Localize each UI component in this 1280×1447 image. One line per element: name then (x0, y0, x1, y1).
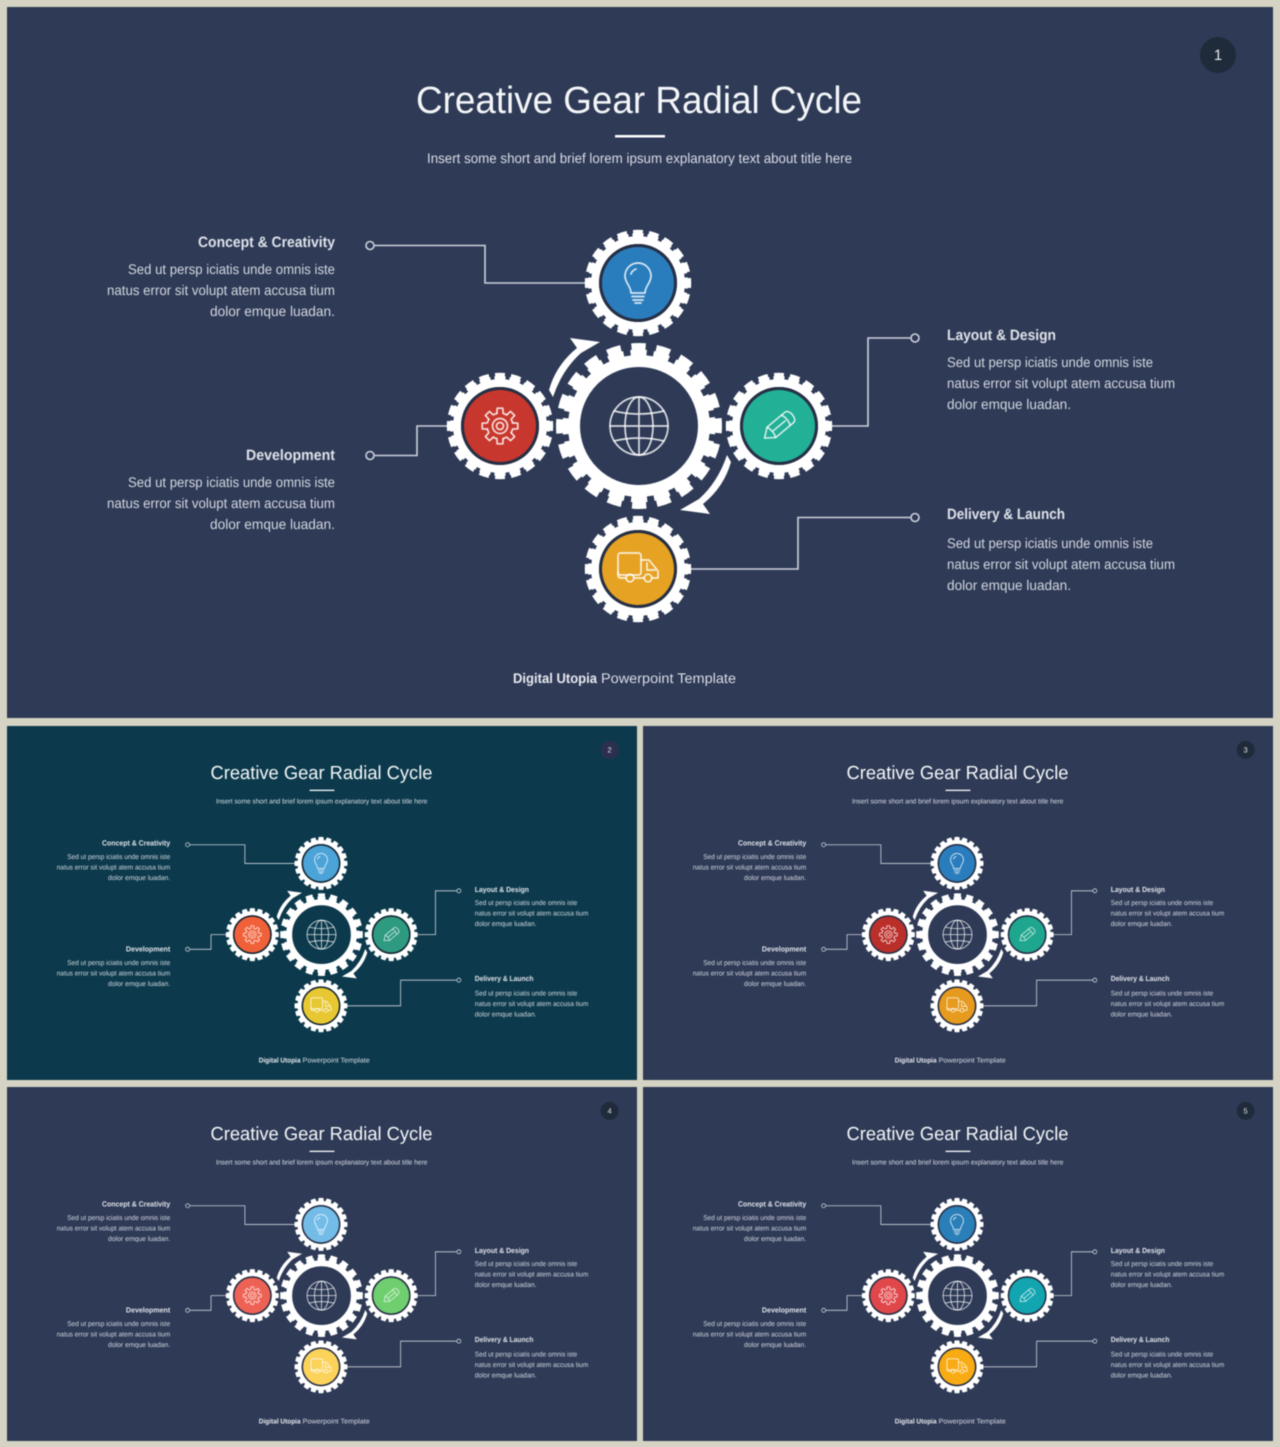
gear: yellow truck (296, 980, 346, 1031)
page number badge: 5 (1244, 1107, 1248, 1115)
panel: slide 3 small navy (642, 725, 1274, 1081)
text block: Concept & Creativity: natus error sit volupt atem accusa tium (107, 282, 335, 298)
text block: Development: Development (246, 447, 335, 464)
text block: Concept & Creativity: Sed ut persp iciatis unde omnis iste (128, 261, 335, 277)
page number badge (1237, 1102, 1255, 1120)
subtitle: Insert some short and brief lorem ipsum explanatory text about title here (427, 150, 852, 166)
text block: Delivery & Launch: dolor emque luadan. (1111, 1010, 1172, 1018)
footer (259, 1417, 370, 1425)
gear: blue bulb (932, 1199, 982, 1250)
text block: Layout & Design: dolor emque luadan. (475, 1281, 536, 1289)
text block: Development: Sed ut persp iciatis unde omnis iste (703, 959, 806, 966)
page number badge: 1 (1214, 47, 1222, 64)
connector: Development (822, 1296, 866, 1312)
connector: Layout (1051, 1250, 1097, 1296)
title divider (946, 1151, 970, 1152)
footer: Digital Utopia (259, 1056, 301, 1064)
text block: Development (57, 1306, 170, 1348)
text block: Delivery & Launch: Sed ut persp iciatis unde omnis iste (1111, 1350, 1213, 1358)
text block: Concept & Creativity: dolor emque luadan. (744, 1234, 806, 1242)
page number badge: 2 (608, 746, 612, 754)
arrow: upper left (277, 891, 302, 920)
gear: green pencil (728, 375, 830, 477)
text block: Development: dolor emque luadan. (108, 1340, 170, 1348)
page number badge: 3 (1244, 746, 1248, 754)
connector: Concept (186, 843, 297, 863)
text block: Development: dolor emque luadan. (108, 979, 170, 987)
text block: Development: natus error sit volupt atem accusa tium (57, 1330, 170, 1338)
gear: green pencil (1002, 909, 1053, 960)
gear: yellow truck (932, 980, 982, 1031)
text block: Delivery & Launch (1111, 1335, 1224, 1379)
gear: light yellow truck (296, 1341, 346, 1392)
arrow: lower right (342, 1310, 367, 1339)
title: Creative Gear Radial Cycle (847, 1123, 1068, 1144)
text block: Development (57, 945, 170, 987)
gear: blue bulb (932, 838, 982, 889)
footer: Powerpoint Template (939, 1056, 1006, 1064)
gear: coral cog (227, 1270, 278, 1321)
text block: Layout & Design: natus error sit volupt atem accusa tium (475, 1270, 588, 1278)
text block: Development (107, 447, 335, 532)
text block: Concept & Creativity: natus error sit volupt atem accusa tium (57, 1224, 170, 1232)
text block: Layout & Design: Sed ut persp iciatis unde omnis iste (475, 1260, 577, 1268)
panel: slide 1 large (6, 6, 1274, 719)
text block: Layout & Design: Layout & Design (475, 885, 529, 894)
page number badge (1237, 741, 1255, 759)
text block: Layout & Design: dolor emque luadan. (947, 396, 1071, 412)
text block: Delivery & Launch: Delivery & Launch (947, 506, 1065, 523)
text block: Delivery & Launch: Delivery & Launch (1111, 974, 1169, 983)
footer (895, 1417, 1006, 1425)
text block: Development: natus error sit volupt atem accusa tium (57, 969, 170, 977)
text block: Layout & Design: natus error sit volupt atem accusa tium (1111, 909, 1224, 917)
text block: Concept & Creativity: natus error sit volupt atem accusa tium (57, 863, 170, 871)
text block: Development: Sed ut persp iciatis unde omnis iste (703, 1320, 806, 1327)
text block: Layout & Design: Layout & Design (947, 327, 1056, 344)
arrow: lower right (680, 455, 731, 514)
text block: Concept & Creativity (693, 1200, 807, 1242)
text block: Development: dolor emque luadan. (744, 979, 806, 987)
connector: Delivery (685, 514, 919, 569)
footer (513, 670, 736, 686)
text block: Concept & Creativity (693, 839, 807, 881)
connector: Layout (415, 889, 461, 935)
text block: Delivery & Launch (947, 506, 1175, 593)
text block: Layout & Design: Sed ut persp iciatis unde omnis iste (1111, 1260, 1213, 1268)
title: Creative Gear Radial Cycle (211, 1123, 432, 1144)
gear: blue bulb (587, 232, 689, 334)
connector: Layout (415, 1250, 461, 1296)
text block: Concept & Creativity: dolor emque luadan. (210, 303, 335, 319)
text block: Delivery & Launch: natus error sit volupt atem accusa tium (1111, 1360, 1224, 1368)
text block: Development: Development (126, 1306, 170, 1315)
panel: slide 4 small navy light colours (6, 1086, 638, 1442)
footer: Powerpoint Template (939, 1417, 1006, 1425)
connector: Delivery (344, 1339, 461, 1367)
text block: Concept & Creativity: Sed ut persp iciatis unde omnis iste (67, 852, 170, 860)
text block: Development: Sed ut persp iciatis unde omnis iste (67, 959, 170, 966)
text block: Development: dolor emque luadan. (744, 1340, 806, 1348)
subtitle: Insert some short and brief lorem ipsum explanatory text about title here (216, 1158, 428, 1166)
text block: Layout & Design: Sed ut persp iciatis unde omnis iste (1111, 899, 1213, 907)
text block: Concept & Creativity: natus error sit volupt atem accusa tium (693, 863, 806, 871)
text block: Layout & Design: dolor emque luadan. (1111, 1281, 1172, 1289)
text block: Development: Sed ut persp iciatis unde omnis iste (67, 1320, 170, 1327)
text block: Layout & Design (1111, 885, 1224, 928)
gear: orange truck (932, 1341, 982, 1392)
arrow: upper left (913, 1252, 938, 1281)
connector: Concept (186, 1204, 297, 1224)
subtitle: Insert some short and brief lorem ipsum explanatory text about title here (852, 797, 1064, 805)
text block: Concept & Creativity (107, 234, 336, 319)
text block: Layout & Design: Sed ut persp iciatis unde omnis iste (475, 899, 577, 907)
arrow: upper left (277, 1252, 302, 1281)
subtitle: Insert some short and brief lorem ipsum explanatory text about title here (852, 1158, 1064, 1166)
gear: green pencil (366, 909, 417, 960)
gear: teal pencil (1002, 1270, 1053, 1321)
page number badge (601, 1102, 619, 1120)
page number badge (601, 741, 619, 759)
text block: Concept & Creativity: Concept & Creativity (738, 1200, 807, 1208)
title divider (310, 1151, 334, 1152)
gear: blue bulb (296, 838, 346, 889)
connector: Concept (822, 1204, 933, 1224)
text block: Development: Development (762, 945, 806, 954)
title: Creative Gear Radial Cycle (847, 762, 1068, 783)
footer: Powerpoint Template (601, 670, 736, 686)
text block: Delivery & Launch: natus error sit volupt atem accusa tium (475, 999, 588, 1007)
text block: Development: dolor emque luadan. (210, 516, 335, 532)
text block: Concept & Creativity: Concept & Creativity (102, 839, 171, 847)
connector: Delivery (344, 978, 461, 1006)
text block: Concept & Creativity: dolor emque luadan. (108, 1234, 170, 1242)
text block: Concept & Creativity: Sed ut persp iciatis unde omnis iste (67, 1213, 170, 1221)
text block: Delivery & Launch: Delivery & Launch (475, 974, 533, 983)
text block: Concept & Creativity: Concept & Creativity (198, 234, 336, 251)
text block: Development (693, 945, 806, 987)
text block: Development: natus error sit volupt atem accusa tium (107, 495, 335, 511)
gear: red cog (863, 1270, 914, 1321)
footer: Powerpoint Template (303, 1056, 370, 1064)
text block: Concept & Creativity (57, 839, 171, 881)
text block: Delivery & Launch: dolor emque luadan. (1111, 1371, 1172, 1379)
text block: Delivery & Launch: Sed ut persp iciatis unde omnis iste (947, 535, 1153, 551)
text block: Layout & Design: Layout & Design (1111, 885, 1165, 894)
text block: Layout & Design: natus error sit volupt atem accusa tium (1111, 1270, 1224, 1278)
gear: orange cog (227, 909, 278, 960)
footer: Digital Utopia (513, 670, 597, 686)
central gear with globe (918, 895, 997, 974)
connector: Development (186, 935, 230, 951)
text block: Delivery & Launch: natus error sit volupt atem accusa tium (475, 1360, 588, 1368)
gear: red cog (863, 909, 914, 960)
text block: Concept & Creativity: dolor emque luadan. (108, 873, 170, 881)
text block: Development: Development (762, 1306, 806, 1315)
arrow: upper left (913, 891, 938, 920)
connector: Concept (822, 843, 933, 863)
connector: Layout (826, 334, 919, 426)
connector: Concept (366, 242, 590, 283)
text block: Concept & Creativity (57, 1200, 171, 1242)
arrow: upper left (549, 338, 600, 397)
gear: light blue bulb (296, 1199, 346, 1250)
text block: Delivery & Launch: Sed ut persp iciatis unde omnis iste (475, 1350, 577, 1358)
text block: Delivery & Launch: dolor emque luadan. (475, 1010, 536, 1018)
footer: Digital Utopia (895, 1056, 937, 1064)
text block: Delivery & Launch: natus error sit volupt atem accusa tium (1111, 999, 1224, 1007)
text block: Development: Development (126, 945, 170, 954)
footer (895, 1056, 1006, 1064)
footer: Powerpoint Template (303, 1417, 370, 1425)
title divider (310, 790, 334, 791)
connector: Layout (1051, 889, 1097, 935)
subtitle: Insert some short and brief lorem ipsum explanatory text about title here (216, 797, 428, 805)
text block: Concept & Creativity: Sed ut persp iciatis unde omnis iste (703, 852, 806, 860)
footer: Digital Utopia (895, 1417, 937, 1425)
text block: Delivery & Launch: natus error sit volupt atem accusa tium (947, 556, 1175, 572)
text block: Layout & Design: Sed ut persp iciatis unde omnis iste (947, 354, 1153, 370)
panel: slide 2 small teal (6, 725, 638, 1081)
connector: Development (366, 426, 455, 460)
arrow: lower right (342, 949, 367, 978)
connector: Development (822, 935, 866, 951)
text block: Layout & Design: natus error sit volupt atem accusa tium (475, 909, 588, 917)
text block: Layout & Design (475, 885, 588, 928)
footer (259, 1056, 370, 1064)
title: Creative Gear Radial Cycle (416, 80, 862, 122)
text block: Delivery & Launch: Delivery & Launch (475, 1335, 533, 1344)
gear: light green pencil (366, 1270, 417, 1321)
text block: Concept & Creativity: dolor emque luadan. (744, 873, 806, 881)
central gear with globe (282, 895, 361, 974)
text block: Delivery & Launch: dolor emque luadan. (947, 577, 1071, 593)
connector: Delivery (980, 1339, 1097, 1367)
central gear with globe (282, 1256, 361, 1335)
footer: Digital Utopia (259, 1417, 301, 1425)
text block: Concept & Creativity: Concept & Creativity (738, 839, 807, 847)
text block: Delivery & Launch (475, 974, 588, 1018)
text block: Layout & Design: Layout & Design (1111, 1246, 1165, 1255)
text block: Delivery & Launch: dolor emque luadan. (475, 1371, 536, 1379)
title divider (946, 790, 970, 791)
text block: Delivery & Launch: Delivery & Launch (1111, 1335, 1169, 1344)
gear: yellow truck (587, 518, 689, 620)
text block: Layout & Design: Layout & Design (475, 1246, 529, 1255)
central gear with globe (560, 346, 718, 506)
text block: Layout & Design: dolor emque luadan. (475, 920, 536, 928)
text block: Concept & Creativity: Sed ut persp iciatis unde omnis iste (703, 1213, 806, 1221)
text block: Delivery & Launch (1111, 974, 1224, 1018)
text block: Development (693, 1306, 806, 1348)
page number badge (1200, 37, 1236, 73)
text block: Concept & Creativity: Concept & Creativity (102, 1200, 171, 1208)
text block: Development: Sed ut persp iciatis unde omnis iste (128, 474, 335, 490)
gear: red cog (449, 375, 551, 477)
text block: Development: natus error sit volupt atem accusa tium (693, 969, 806, 977)
text block: Development: natus error sit volupt atem accusa tium (693, 1330, 806, 1338)
text block: Delivery & Launch (475, 1335, 588, 1379)
page number badge: 4 (608, 1107, 612, 1115)
connector: Delivery (980, 978, 1097, 1006)
arrow: lower right (978, 1310, 1003, 1339)
text block: Delivery & Launch: Sed ut persp iciatis unde omnis iste (1111, 989, 1213, 997)
text block: Layout & Design (947, 327, 1175, 412)
connector: Development (186, 1296, 230, 1312)
text block: Delivery & Launch: Sed ut persp iciatis unde omnis iste (475, 989, 577, 997)
text block: Layout & Design: natus error sit volupt atem accusa tium (947, 375, 1175, 391)
text block: Layout & Design (475, 1246, 588, 1289)
title: Creative Gear Radial Cycle (211, 762, 432, 783)
text block: Layout & Design (1111, 1246, 1224, 1289)
central gear with globe (918, 1256, 997, 1335)
title divider (615, 135, 665, 138)
text block: Concept & Creativity: natus error sit volupt atem accusa tium (693, 1224, 806, 1232)
text block: Layout & Design: dolor emque luadan. (1111, 920, 1172, 928)
arrow: lower right (978, 949, 1003, 978)
panel: slide 5 small navy teal accents (642, 1086, 1274, 1442)
